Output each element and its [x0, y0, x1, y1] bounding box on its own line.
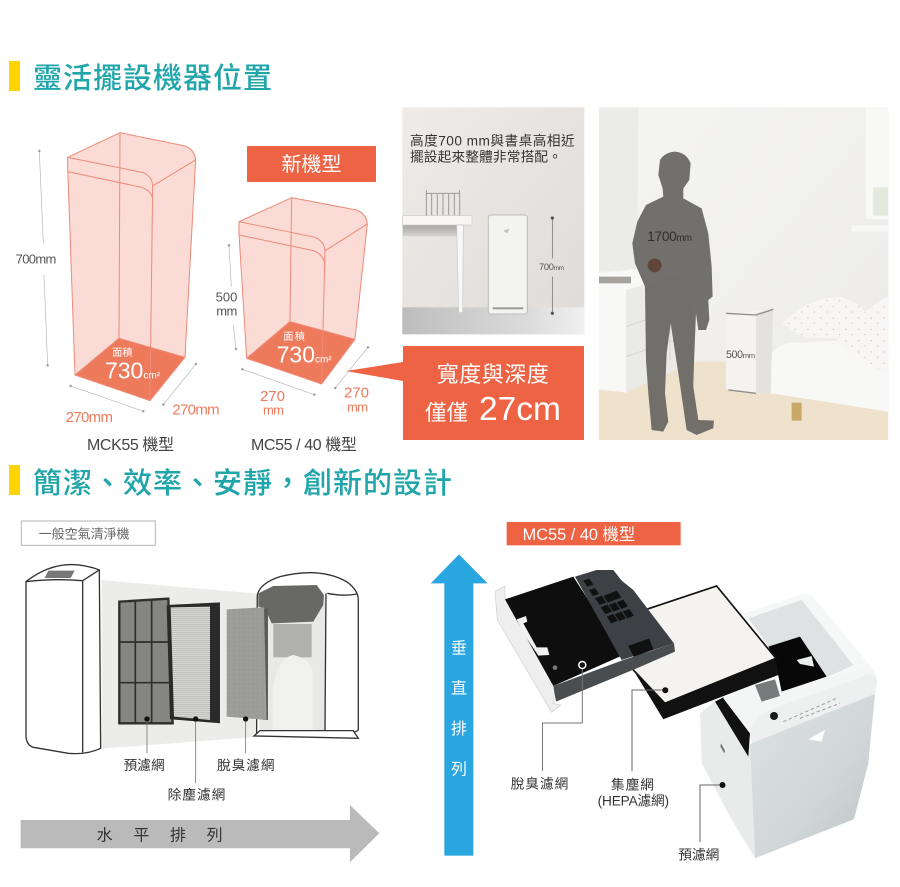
callout: width and depth: 僅僅 — [425, 401, 468, 425]
label: 500mm: 500mm — [726, 349, 755, 361]
label: HEPA: (HEPA濾網) — [598, 793, 669, 808]
text: desk height note: 擺設起來整體非常搭配。 — [410, 149, 562, 164]
heading bar: design — [9, 465, 20, 495]
heading: flexible placement: 靈活擺設機器位置 — [33, 62, 273, 95]
diagram: MCK55 size box — [16, 133, 219, 426]
text: desk height note — [410, 133, 575, 164]
arrow: vertical arrangement: 排 — [451, 720, 467, 738]
label: 700mm: 700mm — [539, 262, 565, 272]
label: area: 面積 — [283, 330, 306, 343]
label: area: 面積 — [112, 346, 133, 359]
label: width: 270 — [260, 388, 285, 405]
arrow: horizontal arrangement: 排 — [170, 827, 186, 845]
label: 730 cm2: 730cm² — [277, 342, 332, 368]
callout: width and depth: 寬度與深度 — [437, 362, 549, 387]
leader: pre-filter — [700, 785, 722, 842]
icon: pre-filter — [119, 599, 173, 723]
label: height: 700mm — [16, 251, 56, 266]
dimension lines — [228, 244, 369, 396]
arrow: horizontal arrangement: 平 — [133, 828, 149, 845]
label: HEPA — [598, 777, 669, 808]
dimension lines — [38, 150, 197, 412]
label: width: 270mm — [66, 409, 112, 426]
label: width unit: mm — [263, 403, 283, 418]
icon: desk — [403, 216, 472, 313]
icon: dust filter — [167, 602, 220, 723]
text: desk height note: 高度700 mm與書桌高相近 — [410, 133, 575, 149]
tag: new model: 新機型 — [282, 153, 342, 176]
label: depth unit: mm — [347, 399, 367, 414]
icon: person silhouette — [632, 152, 714, 435]
marker: deodorizing — [579, 662, 586, 668]
heading bar: flexible placement — [9, 61, 20, 91]
tag: MC55/40: MC55 / 40 機型 — [523, 526, 635, 544]
panel: conventional purifier — [21, 521, 379, 862]
icon: chair back — [426, 190, 460, 216]
dresser — [599, 268, 694, 393]
arrow: vertical arrangement: 列 — [451, 760, 467, 778]
tag: MC55/40 — [507, 522, 681, 545]
icon: purifier front outline — [26, 565, 101, 754]
icon: HEPA filter — [633, 586, 778, 719]
label: 730 cm2: 730cm² — [105, 358, 161, 384]
label: deodorizing filter: 脫臭濾網 — [217, 758, 276, 773]
leader: deodorizing — [542, 669, 582, 771]
icon: roll on dresser — [648, 258, 662, 272]
marker: HEPA — [662, 687, 668, 693]
heading: design: 簡潔、效率、安靜，創新的設計 — [33, 467, 453, 500]
leader lines — [147, 722, 246, 783]
tag: conventional purifier — [21, 521, 155, 545]
marker: pre-filter — [720, 782, 726, 788]
label: HEPA: 集塵網 — [611, 777, 655, 792]
arrow: vertical arrangement: 垂 — [451, 639, 467, 657]
label: depth: 270mm — [172, 402, 219, 419]
callout: width and depth: 27cm — [479, 391, 561, 428]
window — [866, 107, 888, 219]
icon: opened purifier body — [254, 573, 358, 738]
bed — [770, 297, 888, 421]
tag: conventional purifier: 一般空氣清淨機 — [39, 527, 130, 542]
panel: desk comparison — [402, 107, 584, 334]
label: depth: 270 — [344, 385, 369, 402]
label: height unit: mm — [216, 303, 237, 318]
label: pre-filter: 預濾網 — [678, 847, 719, 862]
icon: purifier — [488, 215, 527, 314]
label: 1700mm: 1700mm — [647, 229, 692, 244]
icon: deodorizing filter — [227, 607, 268, 722]
callout: width and depth — [346, 346, 584, 440]
label: pre-filter: 預濾網 — [124, 758, 165, 773]
label: deodorizing: 脫臭濾網 — [511, 776, 569, 791]
label: dust filter: 除塵濾網 — [168, 787, 226, 802]
label: height: 500 — [216, 290, 237, 305]
diagram: MC55/40 size box — [216, 198, 369, 418]
dimension line: 700mm — [551, 217, 554, 315]
panel: MC55/40 vertical arrangement — [431, 522, 877, 862]
tag: new model — [247, 146, 376, 182]
projection shade — [102, 580, 260, 749]
panel: room photo — [599, 107, 888, 440]
leader: HEPA — [632, 690, 665, 771]
arrow: horizontal arrangement — [21, 805, 379, 862]
icon: purifier in room — [726, 309, 773, 393]
icon: deodorizing drawer — [495, 570, 675, 712]
caption: MC55/40: MC55 / 40 機型 — [251, 436, 357, 454]
icon: purifier body — [700, 593, 877, 858]
arrow: vertical arrangement — [431, 554, 488, 856]
arrow: vertical arrangement: 直 — [451, 680, 467, 698]
arrow: horizontal arrangement: 水 — [97, 827, 113, 845]
floor — [599, 362, 888, 440]
caption: MCK55: MCK55 機型 — [87, 436, 174, 454]
arrow: horizontal arrangement: 列 — [207, 827, 223, 845]
